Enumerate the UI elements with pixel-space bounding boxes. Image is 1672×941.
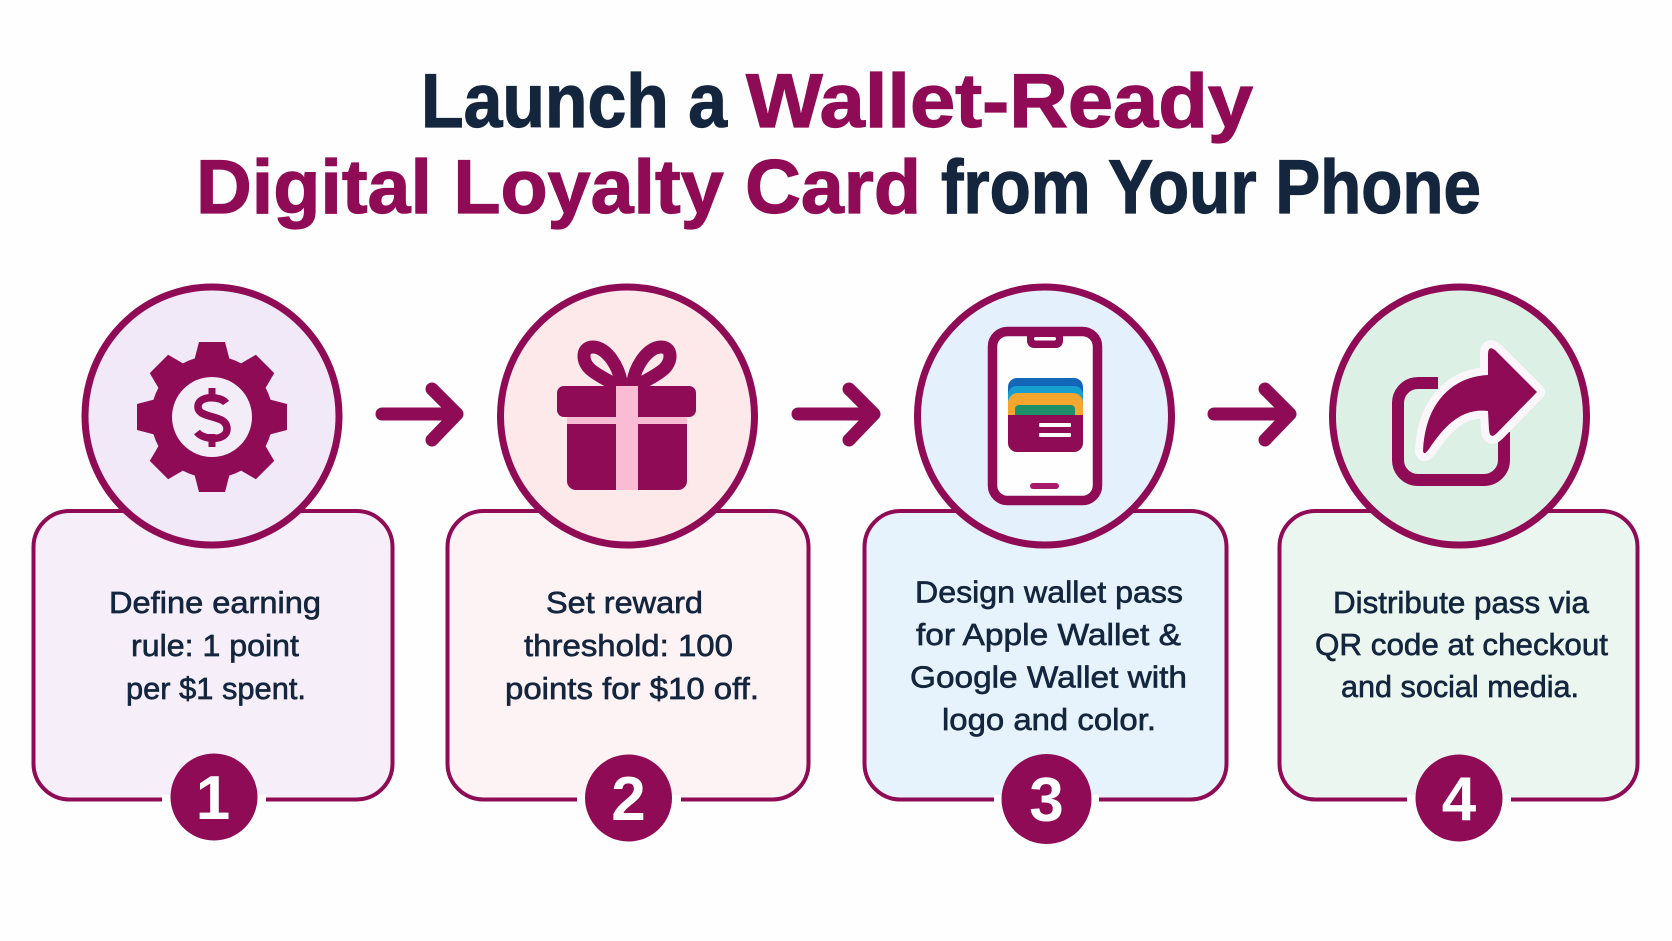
- text: step 4: QR code at checkout: [1315, 627, 1608, 662]
- title: from Your Phone: [941, 145, 1481, 230]
- text: step 1: per $1 spent.: [126, 671, 306, 706]
- card 1: [34, 511, 392, 800]
- icon: share arrow: [1398, 348, 1537, 480]
- badge 2: 2: [611, 765, 646, 834]
- title: Digital Loyalty Card: [196, 145, 921, 230]
- panel: step 2: [448, 287, 808, 842]
- badge 4: [1407, 754, 1511, 842]
- text: step 1: Define earning: [109, 585, 321, 620]
- badge 2: [577, 754, 681, 842]
- card 2: [448, 511, 808, 800]
- text: step 2: [505, 585, 759, 706]
- text: step 3: Google Wallet with: [910, 660, 1187, 694]
- title: Wallet-Ready: [746, 59, 1253, 144]
- text: step 3: [910, 574, 1187, 737]
- panel: step 1: [34, 287, 392, 840]
- icon: gift box: [557, 347, 696, 490]
- text: step 4: and social media.: [1341, 669, 1579, 704]
- arrow 1: [382, 389, 457, 440]
- panel: step 3: [864, 287, 1226, 844]
- icon: phone with wallet: [992, 332, 1098, 500]
- arrow 2: [798, 389, 874, 440]
- panel: step 4: [1280, 287, 1638, 842]
- title: Launch a: [421, 59, 728, 144]
- icon: gear with dollar: [137, 342, 287, 492]
- arrow 3: [1214, 389, 1290, 440]
- card 4: [1280, 511, 1638, 800]
- text: step 3: logo and color.: [942, 702, 1156, 737]
- badge 1: 1: [196, 764, 230, 833]
- text: step 4: [1315, 585, 1608, 704]
- text: step 3: for Apple Wallet &: [916, 617, 1181, 652]
- circle 3: [918, 287, 1172, 545]
- circle 2: [500, 287, 754, 545]
- text: step 1: [109, 585, 321, 706]
- badge 4: 4: [1442, 765, 1477, 834]
- badge 1: [162, 754, 266, 840]
- card 3: [864, 511, 1226, 800]
- circle 4: [1332, 287, 1586, 545]
- title: [196, 59, 1481, 230]
- text: step 1: rule: 1 point: [131, 628, 299, 663]
- circle 1: [85, 287, 339, 545]
- badge 3: 3: [1029, 766, 1064, 835]
- text: step 4: Distribute pass via: [1333, 585, 1590, 620]
- badge 3: [994, 754, 1099, 844]
- text: step 3: Design wallet pass: [915, 574, 1183, 610]
- text: step 2: threshold: 100: [524, 628, 733, 663]
- text: step 2: Set reward: [546, 585, 703, 620]
- text: step 2: points for $10 off.: [505, 671, 759, 706]
